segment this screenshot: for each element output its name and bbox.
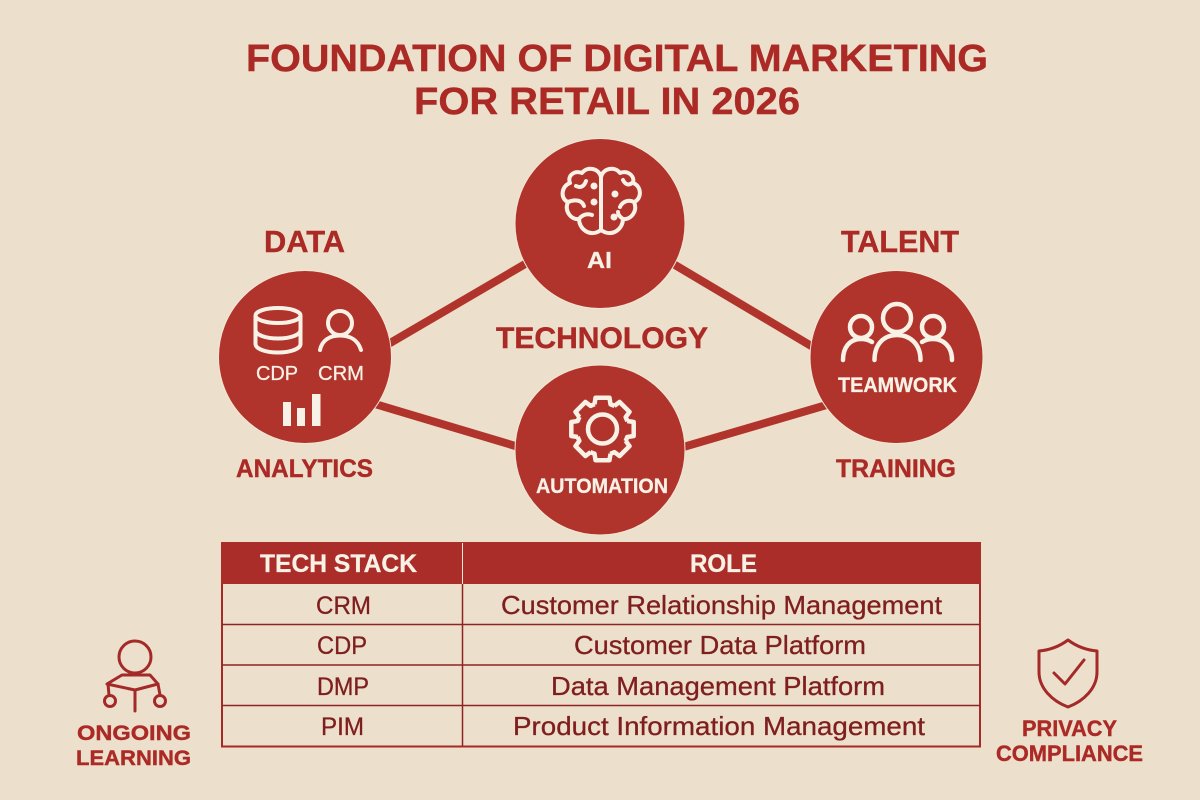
label: teamwork: TEAMWORK [838,374,957,397]
icon: shield with check [1039,640,1097,707]
icon: gear [571,398,634,460]
table header: TECH STACK [260,550,417,578]
connector lines between pillars [375,260,830,448]
row: pim: PIM [321,713,364,741]
label: privacy compliance [996,716,1143,766]
icon: person reading book [104,641,166,711]
panel: ai circle [515,138,685,308]
heading: technology: TECHNOLOGY [496,322,708,355]
callout: ongoing learning [76,641,191,770]
row: pim: Product Information Management [513,711,926,741]
label: crm: CRM [318,363,364,385]
row: crm: Customer Relationship Management [501,590,943,620]
label: training: TRAINING [836,455,956,483]
label: analytics: ANALYTICS [236,455,373,483]
label: cdp: CDP [256,363,298,385]
row: crm [316,590,943,620]
table header: ROLE [690,550,757,578]
label: privacy compliance: PRIVACY [1022,716,1117,741]
row: cdp: Customer Data Platform [574,630,866,660]
title: FOR RETAIL IN 2026 [414,81,800,123]
row: dmp: DMP [317,673,369,701]
heading: talent: TALENT [841,224,959,259]
label: privacy compliance: COMPLIANCE [996,741,1143,766]
icon: brain [563,169,640,233]
panel: automation circle [515,365,685,535]
icon: crm person [320,311,361,350]
panel: talent circle [810,270,983,444]
row: crm: CRM [316,592,371,620]
label: automation: AUTOMATION [536,475,668,498]
heading: data: DATA [264,224,345,259]
icon: database [256,308,300,352]
callout: privacy compliance [996,640,1143,766]
label: ongoing learning: LEARNING [76,747,191,770]
row: cdp: CDP [317,632,367,660]
title: FOUNDATION OF DIGITAL MARKETING [246,38,988,80]
title [246,38,988,123]
row: dmp [317,671,885,701]
label: ongoing learning [76,722,191,770]
table: tech stack [221,542,981,746]
row: pim [321,711,926,741]
icon: bar chart [283,394,320,426]
row: dmp: Data Management Platform [551,671,885,701]
panel: data circle [218,270,392,444]
label: ai: AI [587,247,612,273]
icon: team of three people [843,304,952,360]
table header [221,542,981,584]
row: cdp [317,630,866,660]
label: ongoing learning: ONGOING [77,722,191,745]
